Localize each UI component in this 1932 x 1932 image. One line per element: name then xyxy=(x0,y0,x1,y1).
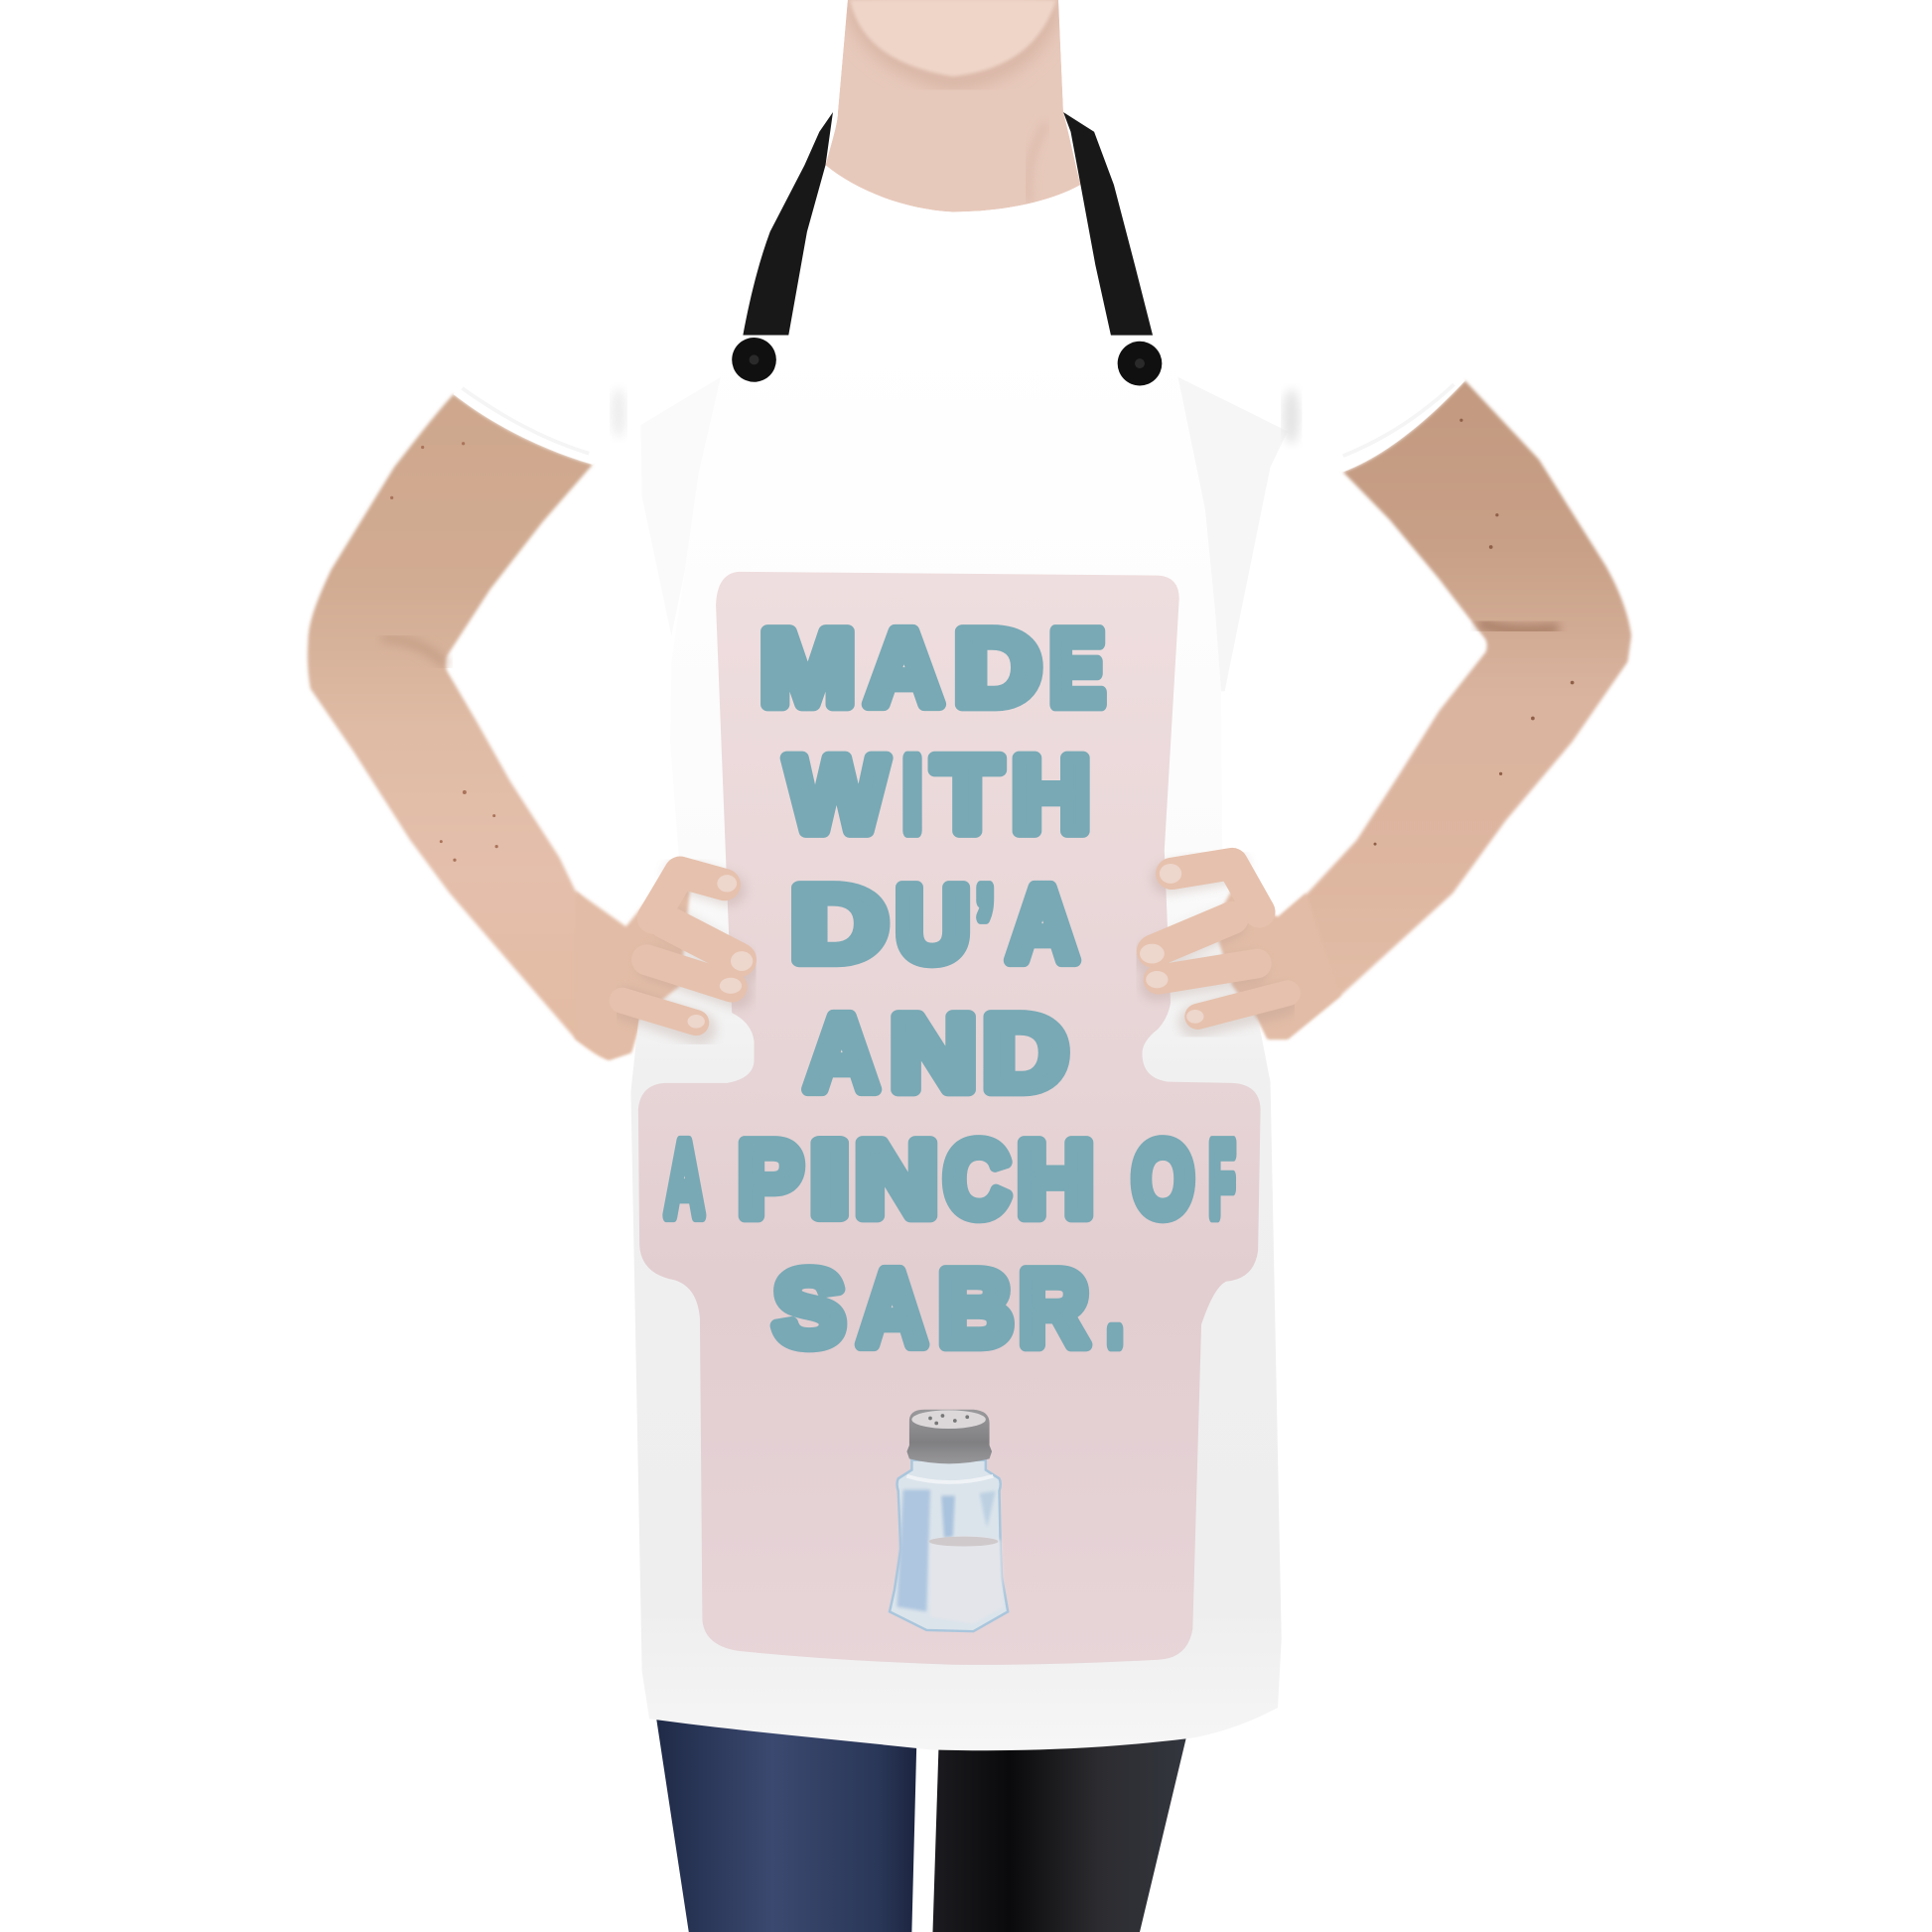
apron mockup scene: F xyxy=(1208,1119,1235,1238)
headline text: N xyxy=(855,1119,938,1238)
headline text: D xyxy=(983,994,1067,1113)
headline text: . xyxy=(1106,1249,1124,1368)
headline text: D xyxy=(954,608,1040,727)
headline text: I xyxy=(902,735,922,854)
headline text xyxy=(665,608,1235,1368)
headline text: A xyxy=(805,994,879,1113)
right arm xyxy=(1232,380,1631,1038)
headline text: W xyxy=(786,735,887,854)
headline text: A xyxy=(866,608,942,727)
headline text: ’ xyxy=(976,864,995,983)
pink print panel xyxy=(638,572,1261,1665)
headline text: A xyxy=(665,1119,704,1238)
neck and chin xyxy=(826,0,1080,211)
headline text: A xyxy=(1008,864,1078,983)
headline text: P xyxy=(738,1119,802,1238)
apron buttons xyxy=(732,338,1162,385)
headline text: M xyxy=(760,608,855,727)
headline text: C xyxy=(944,1119,1010,1238)
headline text: O xyxy=(1132,1119,1193,1238)
jeans xyxy=(655,1713,1187,1932)
headline text: S xyxy=(773,1249,845,1368)
right hand xyxy=(1140,864,1340,1038)
left arm xyxy=(308,394,678,1059)
apron mockup scene xyxy=(306,0,1634,1932)
headline text: D xyxy=(791,864,888,983)
left hand xyxy=(576,873,753,1059)
white apron xyxy=(630,336,1282,1750)
headline text: E xyxy=(1049,608,1105,727)
headline text: B xyxy=(938,1249,1013,1368)
icon: salt shaker xyxy=(890,1410,1008,1631)
headline text: H xyxy=(1018,1119,1094,1238)
headline text: I xyxy=(810,1119,849,1238)
headline text: A xyxy=(858,1249,926,1368)
headline text: N xyxy=(891,994,976,1113)
headline text: U xyxy=(896,864,970,983)
black neck straps xyxy=(743,112,1154,338)
headline text: R xyxy=(1019,1249,1088,1368)
headline text: T xyxy=(933,735,1001,854)
white t-shirt xyxy=(454,123,1465,863)
headline text: H xyxy=(1012,735,1090,854)
